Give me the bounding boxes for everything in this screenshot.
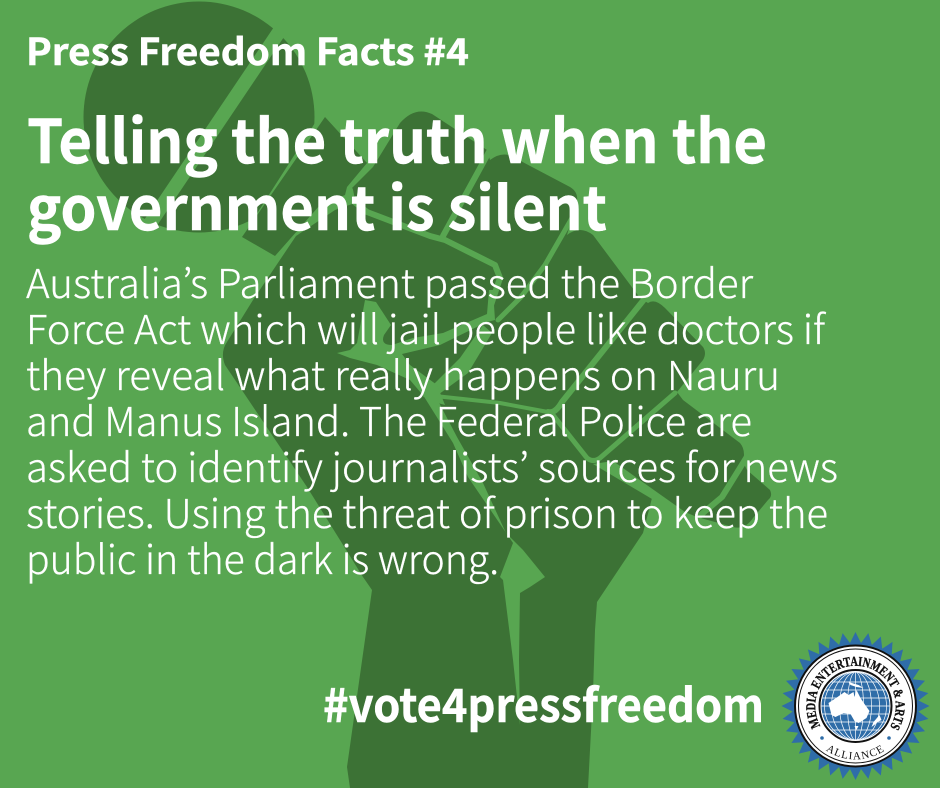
body text block: they reveal what really happens on Nauru — [26, 344, 780, 402]
body text block: stories. Using the threat of prison to keep the — [26, 482, 828, 540]
icon: raised fist holding microphone — [60, 0, 771, 788]
heading: Telling the truth when the government is silent: Telling the truth when the — [27, 94, 767, 181]
heading: Telling the truth when the government is silent: government is silent — [27, 161, 607, 248]
body text block: and Manus Island. The Federal Police are — [26, 390, 752, 448]
hashtag: #vote4pressfreedom — [323, 670, 764, 736]
icon: Media Entertainment & Arts Alliance seal — [782, 632, 930, 780]
title: Press Freedom Facts #4: Press Freedom Facts #4 — [26, 22, 469, 76]
body text block — [26, 252, 838, 586]
icon: Media Entertainment & Arts Alliance seal: MEDIA ENTERTAINMENT & ARTS — [806, 656, 905, 730]
body text block: public in the dark is wrong. — [26, 528, 499, 586]
body text block: Australia’s Parliament passed the Border — [26, 252, 754, 310]
icon: Media Entertainment & Arts Alliance seal: ALLIANCE — [826, 745, 884, 760]
heading: Telling the truth when the government is silent — [27, 94, 767, 248]
body text block: asked to identify journalists’ sources for news — [26, 436, 838, 494]
body text block: Force Act which will jail people like doctors if — [26, 298, 827, 356]
